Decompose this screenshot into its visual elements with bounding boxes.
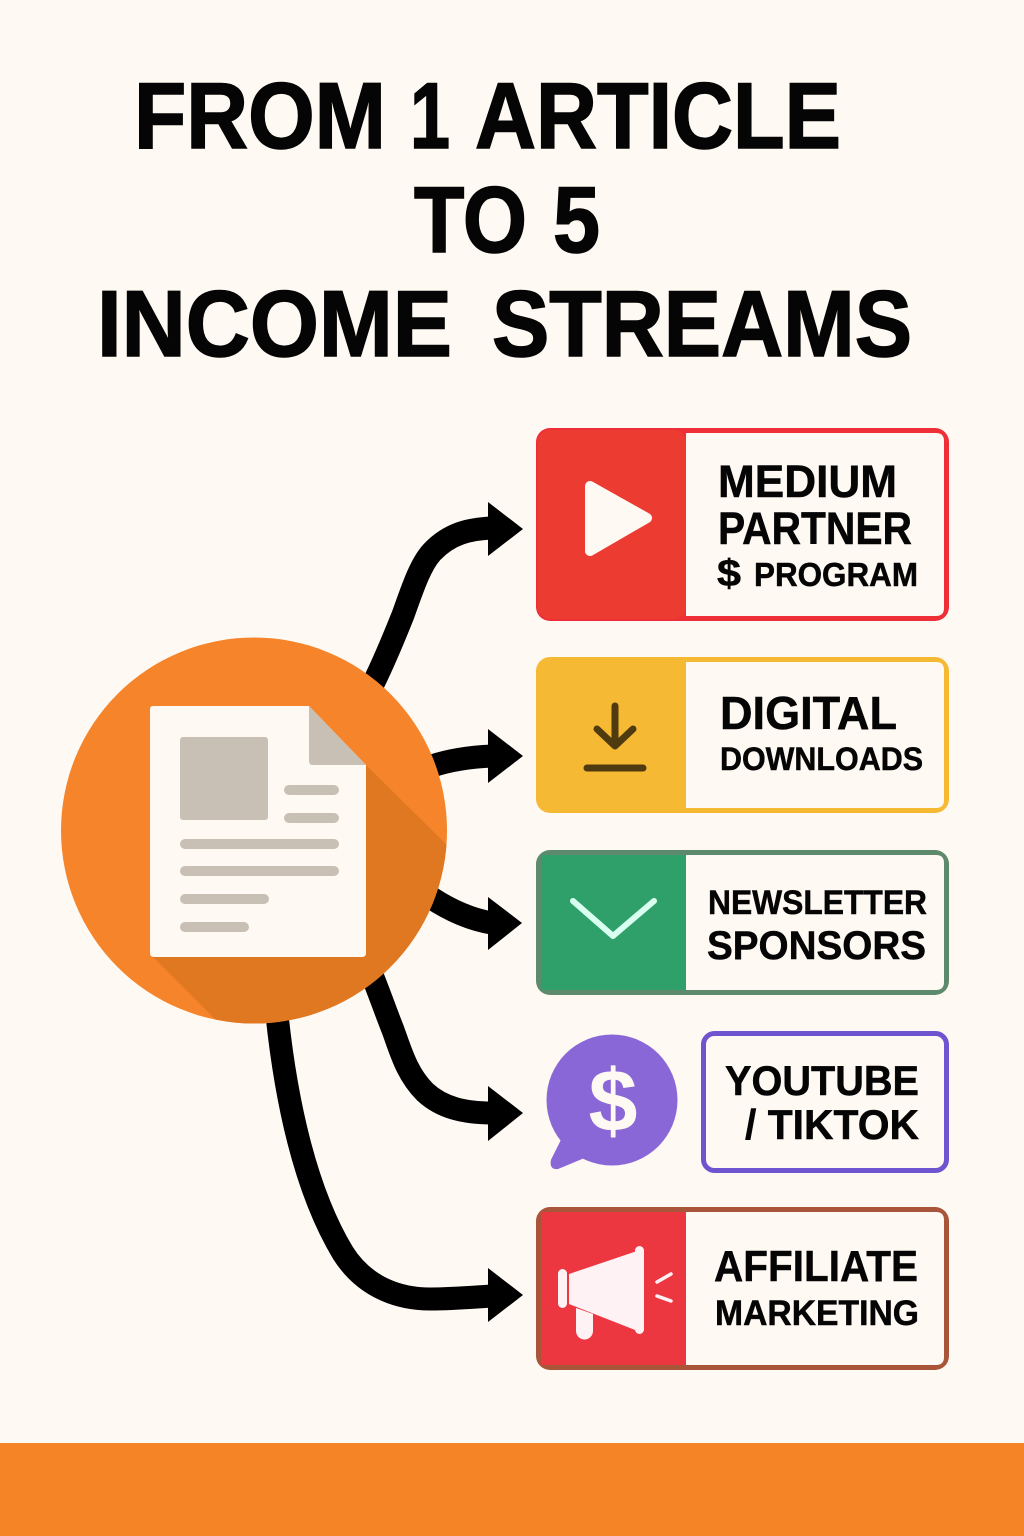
icon: megaphone <box>558 1246 671 1340</box>
card: newsletter sponsors <box>536 850 949 995</box>
card: digital downloads <box>536 657 949 813</box>
arrow to affiliate marketing <box>277 1015 523 1322</box>
title: INCOME <box>97 271 452 376</box>
title: FROM <box>134 63 386 168</box>
card: youtube tiktok: YOUTUBE <box>725 1057 919 1104</box>
icon: speech bubble with dollar sign <box>546 1034 678 1168</box>
title: TO <box>414 167 527 272</box>
icon: article document in orange circle <box>61 638 460 1040</box>
card text: medium partner program: PARTNER <box>718 503 912 554</box>
icon: envelope chevron <box>573 901 654 936</box>
title: 5 <box>553 167 600 272</box>
card text: newsletter sponsors <box>707 884 927 968</box>
card text: digital downloads: DIGITAL <box>720 687 897 739</box>
card text: newsletter sponsors: SPONSORS <box>707 924 926 968</box>
card text: newsletter sponsors: NEWSLETTER <box>708 884 927 922</box>
arrow to youtube and tiktok <box>372 975 523 1141</box>
card text: medium partner program: MEDIUM <box>718 456 897 507</box>
footer band <box>0 1443 1024 1536</box>
card: medium partner program <box>536 428 949 621</box>
card text: medium partner program <box>717 456 918 595</box>
icon: download arrow <box>587 706 643 768</box>
title: 1 <box>410 63 450 168</box>
title: ARTICLE <box>475 63 841 168</box>
arrow to medium partner program <box>372 502 523 686</box>
card text: medium partner program: $ <box>717 553 741 595</box>
title: STREAMS <box>492 271 912 376</box>
card text: digital downloads: DOWNLOADS <box>720 741 923 777</box>
card: youtube tiktok: / TIKTOK <box>745 1101 919 1148</box>
card: youtube tiktok <box>704 1034 946 1170</box>
arrow to digital downloads <box>432 729 523 783</box>
card text: digital downloads <box>720 687 923 777</box>
arrow to newsletter sponsors <box>430 897 522 950</box>
icon: speech bubble with dollar sign: $ <box>589 1051 637 1150</box>
card text: affiliate marketing: AFFILIATE <box>714 1242 918 1291</box>
title <box>97 63 912 376</box>
card: affiliate marketing <box>536 1207 949 1370</box>
card text: medium partner program: PROGRAM <box>754 556 918 593</box>
card text: affiliate marketing: MARKETING <box>715 1294 919 1333</box>
card text: affiliate marketing <box>714 1242 919 1333</box>
arrows from article to income streams <box>277 502 523 1322</box>
icon: play triangle <box>590 486 647 551</box>
